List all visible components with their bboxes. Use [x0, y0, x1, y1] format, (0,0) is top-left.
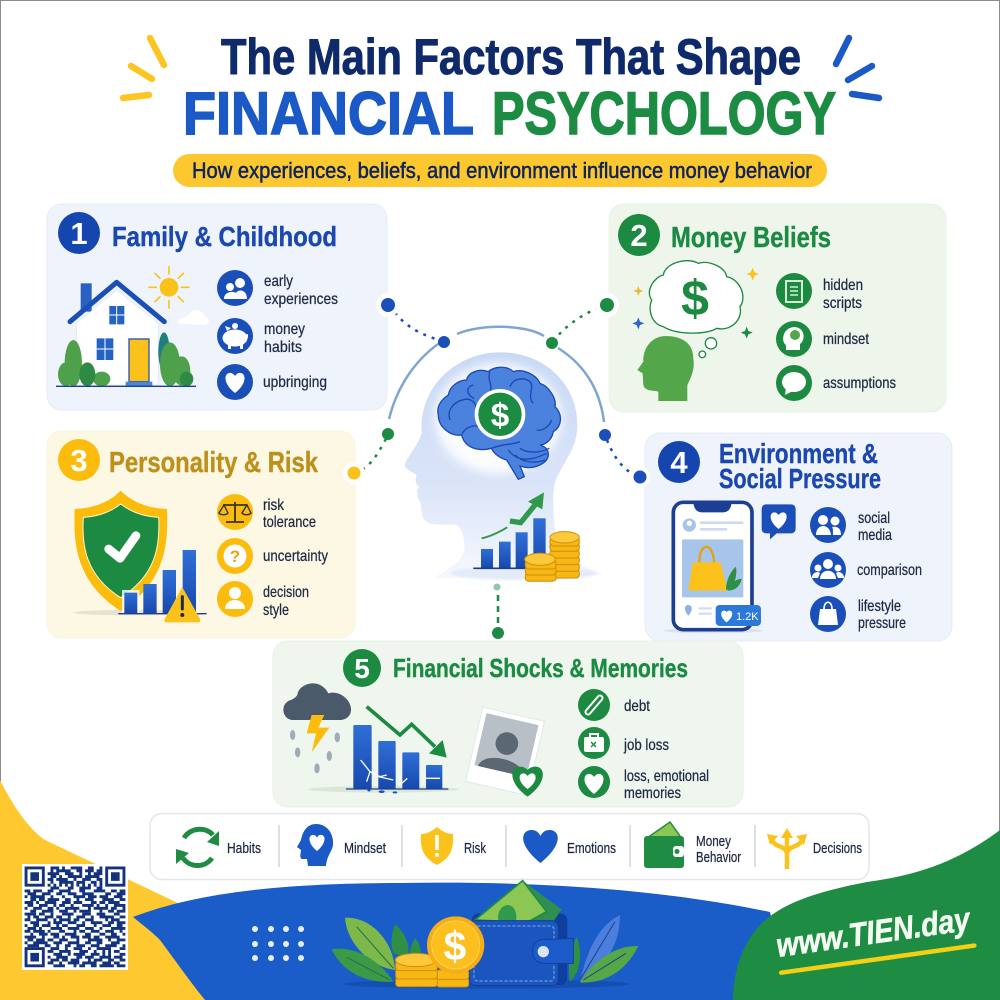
large gold coin [427, 916, 484, 974]
item: early experiences [217, 270, 338, 308]
badge 5 [343, 649, 381, 687]
item: upbringing: upbringing [263, 374, 327, 391]
badge 4 [658, 441, 700, 483]
strip item: mindset [297, 824, 387, 866]
wallet shadow [343, 979, 630, 989]
item: assumptions [776, 365, 896, 401]
wallet clasp [533, 938, 573, 963]
item: mindset [776, 321, 869, 357]
central head illustration [405, 352, 603, 581]
decorative rays right [836, 38, 879, 98]
heading 4: Social Pressure [719, 463, 881, 494]
heading 4: Environment & [719, 438, 878, 469]
strip item: habits: Habits [227, 840, 261, 857]
right leaves [569, 915, 638, 983]
summary strip [150, 814, 869, 880]
strip item: money behavior [644, 822, 741, 868]
panel 4: environment and social pressure [645, 433, 952, 641]
title line 1: The Main Factors That Shape [221, 29, 801, 85]
item: hidden scripts: scripts [823, 295, 862, 312]
title line 2 green: PSYCHOLOGY [492, 80, 836, 147]
website link: www.TIEN.day [774, 900, 973, 964]
left leaves [332, 918, 421, 982]
panel 3: personality and risk [47, 431, 355, 638]
strip item: decisions [767, 828, 862, 869]
badge 1 [58, 212, 100, 254]
item: uncertainty: uncertainty [263, 548, 328, 565]
phone illustration: 1.2K [736, 611, 759, 623]
central head illustration: $ [491, 398, 510, 435]
item: decision style: style [263, 602, 289, 619]
item: lifestyle pressure: pressure [858, 615, 906, 632]
strip item: emotions [523, 830, 616, 863]
decorative rays left [123, 38, 164, 98]
phone illustration [663, 502, 796, 633]
item: decision style: decision [263, 584, 309, 601]
dot grid [252, 926, 304, 961]
item: social media: social [858, 510, 890, 527]
bottom banner background [0, 780, 1000, 1000]
item: debt [578, 689, 650, 721]
badge 3 [58, 439, 100, 481]
item: hidden scripts [776, 273, 863, 312]
item: money habits [217, 318, 305, 356]
strip item: money behavior: Money [696, 833, 731, 850]
item: decision style [217, 581, 309, 619]
item: upbringing [217, 364, 327, 400]
item: social media [810, 507, 892, 544]
strip item: emotions: Emotions [567, 840, 616, 857]
subtitle pill: How experiences, beliefs, and environment influence money behavior [192, 158, 812, 183]
shadow [450, 567, 597, 580]
coin stacks [395, 953, 469, 987]
item: hidden scripts: hidden [823, 277, 863, 294]
brain [438, 367, 560, 479]
item: loss emotional memories: loss, emotional [624, 768, 709, 785]
strip item: risk [421, 827, 486, 865]
QR code [22, 864, 128, 970]
item: lifestyle pressure: lifestyle [858, 598, 901, 615]
storm and falling bars illustration [283, 683, 544, 797]
badge 4: 4 [670, 445, 688, 480]
item: risk tolerance: risk [263, 497, 285, 514]
item: early experiences: experiences [264, 291, 338, 308]
brain coin [475, 389, 525, 440]
item: mindset: mindset [823, 331, 869, 348]
item: money habits: habits [264, 339, 302, 356]
item: job loss: job loss [623, 737, 669, 754]
item: uncertainty: ? [230, 547, 240, 566]
link underline [781, 946, 974, 973]
title block [123, 29, 879, 187]
wallet illustration [332, 881, 638, 989]
heading 4 [719, 438, 881, 494]
panel 2: money beliefs [609, 204, 946, 412]
item: debt: debt [624, 698, 650, 715]
item: job loss [578, 727, 669, 759]
central connectors [354, 305, 640, 625]
connector dots [343, 293, 650, 639]
wallet body [469, 921, 558, 986]
item: risk tolerance: tolerance [263, 514, 316, 531]
rising bars [481, 518, 546, 568]
title line 2 blue: FINANCIAL [183, 80, 474, 147]
item: early experiences: early [264, 273, 293, 290]
item: loss emotional memories [578, 766, 709, 802]
heading 5: Financial Shocks & Memories [393, 653, 688, 683]
item: lifestyle pressure [810, 596, 906, 632]
item: uncertainty [217, 538, 328, 574]
panel 5: financial shocks and memories [273, 641, 743, 807]
badge 1: 1 [70, 216, 88, 251]
item: loss emotional memories: memories [624, 785, 681, 802]
item: comparison [810, 552, 922, 588]
item: money habits: money [264, 321, 305, 338]
banknotes [475, 881, 562, 923]
heading 2: Money Beliefs [671, 222, 831, 254]
thought head illustration: $ [681, 271, 709, 327]
growth arrow [482, 492, 544, 538]
house illustration [56, 267, 209, 387]
heading 3: Personality & Risk [109, 447, 319, 479]
strip item: money behavior: Behavior [696, 849, 741, 866]
item: assumptions: assumptions [823, 375, 896, 392]
thought head illustration [632, 261, 759, 401]
strip item: mindset: Mindset [344, 840, 387, 857]
item: risk tolerance [217, 494, 316, 531]
strip item: decisions: Decisions [813, 840, 862, 857]
strip item: habits [176, 829, 261, 866]
strip item: risk: Risk [464, 840, 486, 857]
head silhouette [405, 352, 603, 578]
badge 5: 5 [354, 653, 370, 684]
wallet back [472, 913, 567, 985]
badge 2: 2 [630, 218, 648, 253]
item: social media: media [858, 527, 892, 544]
coin stacks [525, 532, 579, 581]
shield illustration [73, 491, 207, 622]
heading 1: Family & Childhood [112, 221, 337, 252]
large gold coin: $ [444, 923, 467, 969]
panel 1: family and childhood [47, 204, 387, 410]
badge 3: 3 [70, 443, 88, 478]
head inner glow [435, 363, 562, 473]
badge 2 [618, 214, 660, 256]
item: comparison: comparison [857, 562, 922, 579]
